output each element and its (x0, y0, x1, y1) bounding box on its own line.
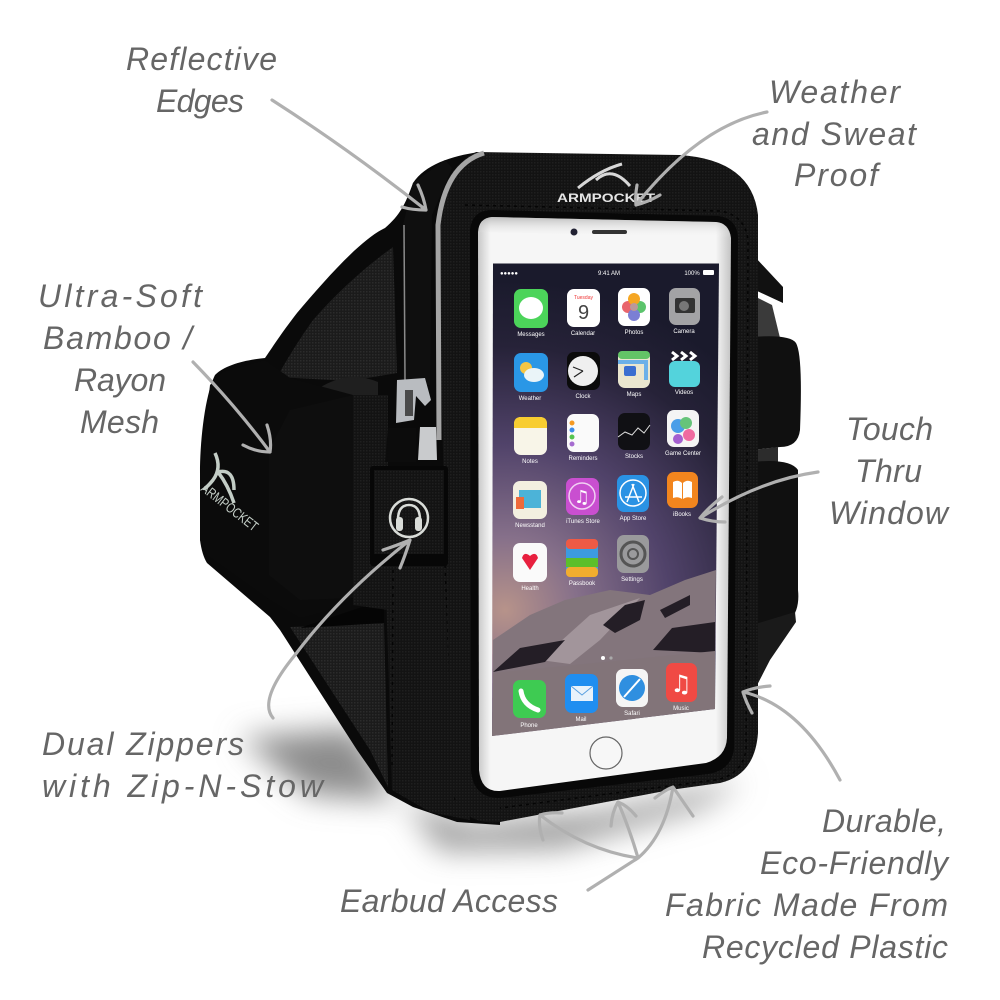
page dots (601, 656, 613, 660)
armband (198, 152, 801, 825)
app: Health (513, 543, 547, 592)
ground shadow (240, 728, 745, 850)
label: weather and sweat proof: Weather (769, 74, 901, 110)
app: Health: Health (521, 586, 539, 592)
home button (590, 737, 622, 769)
app: Phone (513, 680, 546, 729)
label: durable fabric: Fabric Made From (665, 887, 948, 923)
app: iTunes Store: iTunes Store (566, 519, 601, 525)
app: Settings: Settings (621, 577, 643, 583)
app: Mail (565, 674, 598, 723)
arrow: earbud access (539, 787, 693, 890)
arrow: durable fabric (743, 686, 840, 780)
status bar: 100% (684, 271, 700, 277)
label: weather and sweat proof: Proof (794, 157, 881, 193)
main zipper (403, 160, 452, 385)
strap logo: ARMPOCKET (198, 480, 262, 534)
side strap fabric (353, 395, 388, 610)
phone (478, 217, 731, 791)
label: touch thru window: Window (829, 495, 950, 531)
zipper pulls (385, 378, 437, 462)
back body silhouette (200, 152, 500, 825)
screen (492, 264, 719, 736)
app: Calendar: Tuesday (574, 295, 593, 301)
phone top shading (480, 217, 731, 238)
label: reflective edges: Edges (156, 83, 244, 119)
app: Passbook: Passbook (569, 581, 596, 587)
reflective edge (438, 153, 484, 440)
zip tab with headphone icon (370, 466, 448, 566)
app: Reminders (567, 414, 599, 462)
label: ultra-soft mesh: Bamboo / (43, 320, 195, 356)
app: Passbook (566, 539, 598, 587)
app: iTunes Store: ♫ (574, 487, 590, 508)
label: earbud access: Earbud Access (340, 883, 558, 919)
app: iTunes Store (566, 478, 601, 525)
label: dual zippers: Dual Zippers (42, 726, 244, 762)
strap logo (198, 453, 262, 534)
app: Newsstand (513, 481, 547, 529)
arrow: dual zippers (269, 540, 410, 718)
right side straps (752, 257, 801, 695)
label: durable fabric: Durable, (822, 803, 946, 839)
app: Phone: Phone (520, 723, 538, 729)
app: Stocks (618, 413, 650, 460)
front logo (557, 164, 656, 205)
front column fabric (385, 555, 470, 820)
app: Stocks: Stocks (625, 454, 643, 460)
app: Videos (669, 350, 700, 396)
front panel (437, 152, 758, 822)
app: Maps (618, 351, 650, 398)
app: Photos (618, 288, 650, 336)
app: Clock (567, 352, 600, 400)
label: reflective edges (126, 41, 277, 119)
app: Notes: Notes (522, 459, 538, 465)
app: Mail: Mail (575, 717, 587, 723)
label: ultra-soft mesh: Mesh (80, 404, 159, 440)
app: Settings (617, 535, 649, 583)
app: Maps: Maps (627, 392, 641, 398)
label: touch thru window (829, 411, 950, 531)
label: weather and sweat proof: and Sweat (752, 116, 917, 152)
buckle (312, 377, 378, 398)
app: Messages (514, 289, 548, 338)
label: weather and sweat proof (752, 74, 917, 193)
app: Photos: Photos (625, 330, 643, 336)
app: Camera (669, 288, 700, 335)
app: Notes (514, 417, 547, 465)
label: dual zippers (42, 726, 325, 804)
app: Calendar: Calendar (571, 331, 595, 337)
label: durable fabric: Eco-Friendly (760, 845, 950, 881)
panel dark inner band (470, 210, 738, 798)
dock (492, 651, 715, 736)
app: Calendar: 9 (578, 302, 589, 324)
status bar (500, 270, 714, 277)
icon: headphones (390, 499, 428, 537)
side mesh panel (277, 247, 397, 381)
app: App Store: App Store (620, 516, 647, 522)
phone body (478, 217, 731, 791)
label: touch thru window: Touch (846, 411, 933, 447)
app: Music: Music (673, 706, 689, 712)
app: Safari: Safari (624, 711, 640, 717)
label: ultra-soft mesh (38, 278, 203, 440)
label: touch thru window: Thru (855, 453, 922, 489)
status bar: 9:41 AM (598, 271, 620, 277)
app: iBooks: iBooks (673, 512, 691, 518)
label: ultra-soft mesh: Ultra-Soft (38, 278, 203, 314)
app icons (513, 288, 701, 729)
app: App Store (617, 475, 649, 522)
app: Music: ♫ (670, 670, 692, 698)
app: Videos: Videos (675, 390, 693, 396)
app: Newsstand: Newsstand (515, 523, 545, 529)
wallpaper mountains (493, 570, 716, 674)
app: Game Center (665, 410, 701, 457)
app: Calendar (567, 289, 600, 337)
app: Reminders: Reminders (568, 456, 598, 462)
arrow: reflective edges (272, 100, 426, 210)
arrow: ultra-soft mesh (193, 362, 271, 452)
app: Messages: Messages (517, 332, 545, 338)
app: Camera: Camera (673, 329, 695, 335)
label: dual zippers: with Zip-N-Stow (42, 768, 325, 804)
app: Game Center: Game Center (665, 451, 701, 457)
lower mesh panel (290, 623, 388, 787)
app: iBooks (667, 472, 698, 518)
label: reflective edges: Reflective (126, 41, 277, 77)
arrow: weather and sweat proof (636, 112, 767, 205)
app: Safari (616, 669, 648, 717)
app: Music (666, 663, 697, 712)
label: ultra-soft mesh: Rayon (74, 362, 166, 398)
app: Clock: Clock (575, 394, 591, 400)
front logo: ARMPOCKET (557, 191, 656, 205)
label: durable fabric (665, 803, 950, 965)
app: Weather (514, 353, 548, 402)
status bar: ●●●●● (500, 271, 518, 277)
strap block: bamboo mesh (200, 360, 384, 628)
arrow: touch thru window (700, 472, 818, 522)
panel stitching (465, 205, 748, 808)
app: Weather: Weather (519, 396, 541, 402)
label: durable fabric: Recycled Plastic (702, 929, 948, 965)
speaker and camera (570, 228, 627, 236)
